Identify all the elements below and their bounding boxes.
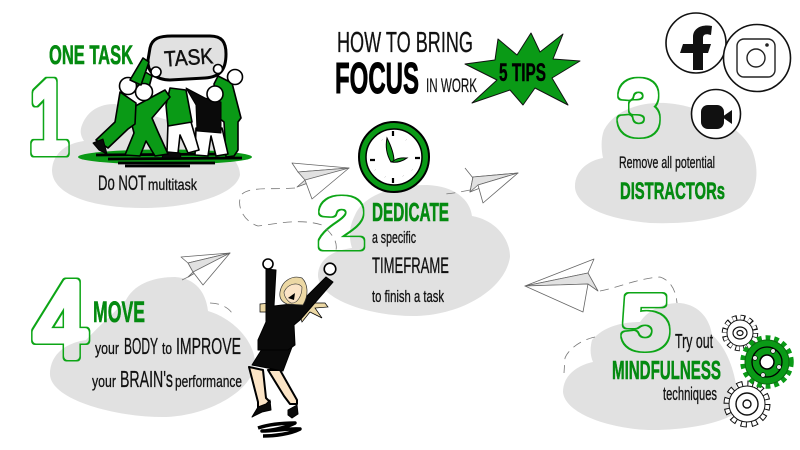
- illustration: jumping woman: [249, 259, 336, 436]
- head and hair: [280, 277, 307, 305]
- heading: distractors: DISTRACTORs: [620, 178, 725, 205]
- text: your brain's performance: BRAIN's: [120, 366, 173, 392]
- text: a specific timeframe: TIMEFRAME: [372, 253, 449, 278]
- person in centre: [167, 122, 199, 153]
- shadow scribble: [258, 423, 300, 436]
- rock with task label: [148, 36, 226, 80]
- illustration: team lifting task: [78, 36, 252, 166]
- panel: tip 1 one task: [29, 36, 252, 208]
- heading: mindfulness: MINDFULNESS: [612, 355, 721, 385]
- cloud 3: [575, 103, 756, 223]
- badge: 5 tips star: 5 TIPS: [499, 59, 546, 87]
- icon: large paper plane: [525, 259, 598, 312]
- number 2: 2: [320, 186, 363, 260]
- person in front: [125, 90, 170, 156]
- ground shadow: [78, 150, 252, 164]
- title: FOCUS: [335, 54, 419, 103]
- text: try out: Try out: [675, 331, 713, 353]
- text: techniques: techniques: [663, 384, 717, 404]
- icon: video camera: [692, 90, 740, 138]
- text: do not multitask: multitask: [148, 177, 198, 194]
- icon: small outline gear: [725, 318, 755, 348]
- text: your body to improve: IMPROVE: [176, 333, 241, 359]
- icon: paper plane left: [181, 253, 230, 285]
- hands: [263, 259, 273, 269]
- title: [335, 27, 477, 103]
- text: your body to improve: BODY: [124, 333, 158, 359]
- text: a specific timeframe: [372, 228, 449, 306]
- panel: tip 5 mindfulness: [563, 284, 738, 430]
- dashed flight paths: [182, 188, 677, 373]
- text: a specific timeframe: a specific: [372, 228, 416, 247]
- icon: instagram: [724, 24, 790, 92]
- title: IN WORK: [426, 76, 477, 97]
- text: your body to improve: your: [95, 339, 119, 358]
- person far right: [214, 76, 241, 157]
- text: your brain's performance: your: [92, 372, 116, 391]
- person stepping back: [96, 92, 136, 148]
- text: remove all potential: Remove all potential: [619, 153, 715, 172]
- icon: paper plane top right: [465, 168, 518, 203]
- title: HOW TO BRING: [337, 27, 473, 59]
- icon: outline gear: [727, 384, 767, 424]
- icon: paper plane top left: [292, 163, 349, 199]
- heading: move: MOVE: [93, 296, 145, 329]
- text: do not multitask: Do NOT: [98, 172, 146, 195]
- jacket and arms: [258, 269, 333, 350]
- text: your body to improve: to: [162, 339, 172, 358]
- panel: tip 2 dedicate: [318, 185, 510, 316]
- number 5: 5: [623, 284, 668, 363]
- number 4: 4: [34, 261, 88, 379]
- number 1: 1: [29, 62, 69, 174]
- cloud 1: [52, 104, 240, 208]
- text: a specific timeframe: to finish a task: [372, 287, 444, 306]
- panel: tip 4 move: [34, 261, 255, 417]
- cloud 4: [50, 277, 255, 417]
- icon: clock: [359, 122, 429, 192]
- heading: dedicate: DEDICATE: [372, 197, 449, 227]
- icon: facebook: [666, 13, 726, 73]
- hair strands: [299, 303, 328, 322]
- heading: one task: ONE TASK: [49, 40, 133, 70]
- shoes: [252, 400, 271, 417]
- badge: 5 tips star: [465, 33, 580, 105]
- rock with task label: TASK: [163, 43, 214, 72]
- skirt: [252, 347, 292, 371]
- text: your brain's performance: [92, 366, 242, 392]
- cloud 2: [318, 185, 510, 316]
- number 3: 3: [619, 69, 658, 149]
- cloud 5: [563, 303, 738, 430]
- text: your body to improve: [95, 333, 241, 359]
- icon: green gear: [744, 338, 790, 386]
- panel: tip 3 remove distractors: [575, 69, 756, 223]
- person in black: [195, 128, 228, 156]
- legs: [249, 367, 270, 412]
- text: your brain's performance: performance: [175, 372, 242, 391]
